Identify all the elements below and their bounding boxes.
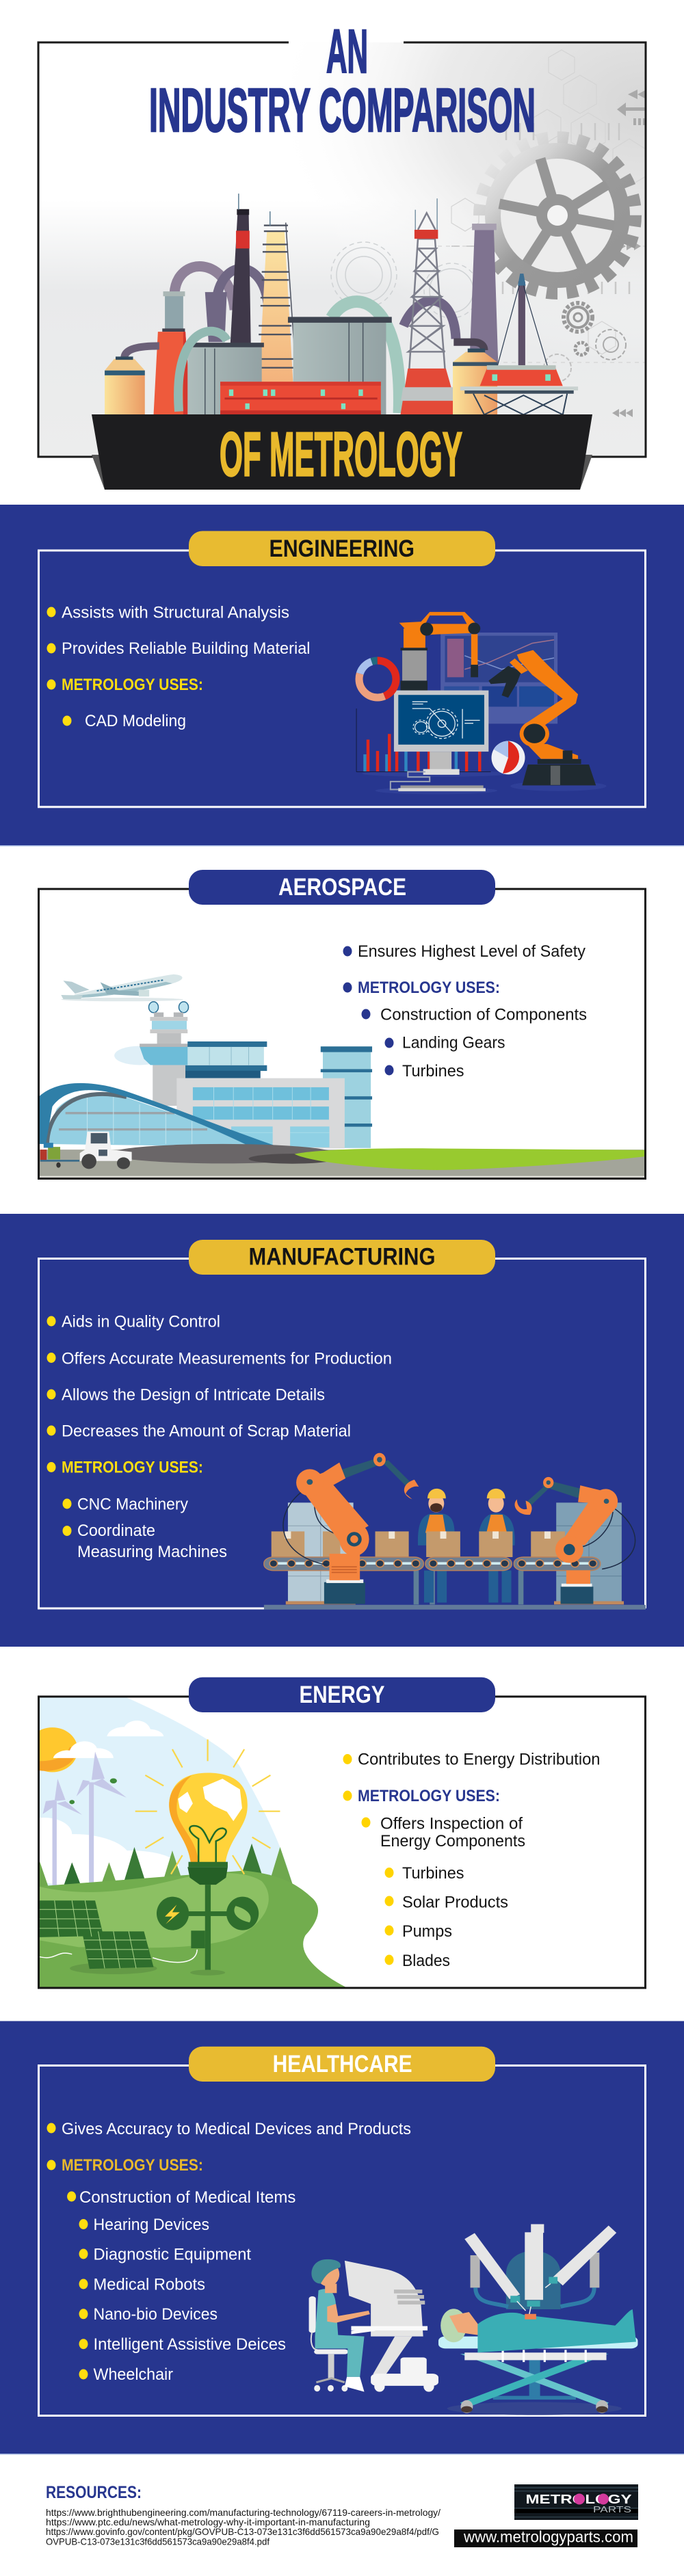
bulb base and post: [157, 1862, 259, 1976]
conveyors: [264, 1557, 601, 1571]
bullet: hearing devices: Hearing Devices: [93, 2216, 209, 2234]
ground: [39, 1150, 645, 1178]
heading pill: [189, 870, 495, 905]
control tower: [114, 1002, 197, 1106]
right red platform: [460, 365, 578, 414]
icon: outline gears: [331, 242, 479, 318]
bar chart: [356, 708, 491, 772]
bullet: landing gears: Landing Gears: [402, 1034, 505, 1052]
robot white arms: [464, 2224, 616, 2300]
heading pill: ENGINEERING: [269, 535, 415, 562]
oil derrick: [408, 198, 445, 369]
main building: [176, 1078, 345, 1148]
striped tower: [256, 211, 297, 384]
bullet list: [343, 942, 587, 1080]
frame: [38, 889, 646, 1179]
bullet: wheelchair: Wheelchair: [93, 2365, 173, 2384]
tarmac: [110, 1144, 336, 1164]
panel: header: [38, 18, 646, 490]
airplane: [61, 974, 183, 1001]
right yellow tank: [453, 349, 497, 414]
illustration: renewable energy landscape: [15, 1697, 347, 1988]
grass: [295, 1148, 645, 1170]
bullet: scrap material: Decreases the Amount of Scrap Material: [62, 1422, 351, 1441]
title: [149, 18, 536, 145]
monitor: [394, 691, 488, 775]
right robot: [514, 1477, 635, 1604]
bullet: metrology uses: METROLOGY USES:: [62, 2156, 203, 2175]
back pipes and chimneys: [174, 224, 498, 364]
background dashboard: [440, 633, 557, 723]
hills: [38, 1870, 347, 1988]
ground: [264, 1605, 646, 1610]
title: AN: [326, 18, 368, 86]
shelving stacks: [286, 1502, 624, 1604]
website badge: www.metrologyparts.com: [463, 2527, 633, 2545]
heading: RESOURCES:: [46, 2483, 142, 2502]
decorative marks bottom right: [612, 409, 633, 417]
sky: [38, 1697, 292, 1888]
derrick red cap and cone base: [401, 230, 459, 414]
clouds: [40, 1721, 179, 1885]
panel: manufacturing: [0, 1214, 684, 1647]
icon: large gear: [481, 139, 634, 292]
bullet: cnc machinery: CNC Machinery: [77, 1495, 189, 1514]
bullet: pumps: Pumps: [402, 1922, 452, 1941]
trees: [40, 1844, 293, 1886]
sun: [40, 1727, 114, 1772]
rays: [135, 1740, 280, 1874]
bullet: turbines: Turbines: [402, 1062, 464, 1080]
ruler ticks: [492, 123, 629, 294]
right robot arm: [488, 650, 596, 786]
header frame border: [38, 42, 646, 457]
heading pill: ENERGY: [300, 1682, 384, 1708]
bullet list: [47, 1313, 392, 1561]
workers: [418, 1489, 515, 1603]
ribbon fold: [92, 455, 592, 490]
url list: OVPUB-C13-073e131c3f6dd561573ca9a90e29a8f4.pdf: [46, 2536, 269, 2547]
heading pill: MANUFACTURING: [249, 1244, 435, 1271]
url list: https://www.brighthubengineering.com/manufacturing-technology/67119-careers-in-metrology/: [46, 2507, 440, 2518]
bullet: accuracy: Gives Accuracy to Medical Devices and Products: [62, 2120, 411, 2138]
bullet: medical robots: Medical Robots: [93, 2276, 205, 2294]
surgeon: [309, 2259, 370, 2392]
bullet: safety: Ensures Highest Level of Safety: [358, 942, 586, 961]
wind turbines: [43, 1752, 127, 1891]
robot support arms: [471, 2253, 599, 2307]
boxes: [272, 1531, 565, 1557]
bullet: construction of components: Construction of Components: [380, 1005, 587, 1024]
bullet: inspection of energy components: [361, 1815, 525, 1850]
baggage tug: [40, 1132, 132, 1169]
frame: [38, 1258, 646, 1608]
left yellow tank with pipe: [105, 346, 159, 414]
bullet: nano-bio devices: Nano-bio Devices: [93, 2305, 218, 2324]
url list: https://www.ptc.edu/news/what-metrology-why-it-important-in-manufacturing: [46, 2517, 370, 2527]
panel: energy: [15, 1677, 646, 1988]
shadow: [447, 2402, 622, 2415]
bullet: structural analysis: Assists with Structural Analysis: [62, 603, 289, 622]
oil rig mast: [497, 274, 547, 367]
bullet: inspection of energy components: Energy Components: [380, 1832, 525, 1850]
background hexagon pattern: [438, 50, 646, 362]
operating table: [438, 2337, 637, 2413]
heading pill: [189, 1677, 495, 1712]
banner: [92, 414, 592, 490]
curved terminal: [39, 1083, 281, 1147]
bullet: coordinate measuring machines: Coordinate: [77, 1522, 155, 1540]
shadows: [362, 771, 607, 794]
right glass tower: [321, 1046, 372, 1148]
bullet: coordinate measuring machines: Measuring Machines: [77, 1543, 227, 1561]
panel: aerospace: [38, 870, 646, 1179]
bullet: turbines: Turbines: [402, 1864, 464, 1883]
left red building and column: [154, 291, 191, 414]
patient: [440, 2309, 636, 2352]
logo: metrology parts: PARTS: [593, 2504, 631, 2514]
bullet list: [47, 603, 311, 730]
heading pill: [189, 531, 495, 566]
robot column: [506, 2251, 561, 2309]
upper wing: [185, 1041, 267, 1078]
bullet: solar products: Solar Products: [402, 1893, 508, 1912]
icon: donut chart: [359, 661, 396, 698]
bullet: cad modeling: CAD Modeling: [85, 712, 186, 730]
box tape: [285, 1531, 551, 1539]
surgeon console: [345, 2261, 438, 2392]
bullet: metrology uses: METROLOGY USES:: [358, 1787, 500, 1805]
bullet: inspection of energy components: Offers Inspection of: [380, 1815, 523, 1833]
illustration: engineering robots and monitor: [356, 612, 607, 794]
bullet: quality control: Aids in Quality Control: [62, 1313, 220, 1331]
bullet: coordinate measuring machines: [63, 1522, 227, 1561]
frame: [38, 1697, 646, 1988]
red platform: [220, 382, 381, 414]
bullet: metrology uses: METROLOGY USES:: [358, 979, 500, 997]
bullet: building material: Provides Reliable Building Material: [62, 639, 311, 658]
frame: [38, 550, 646, 807]
bullet: diagnostic equipment: Diagnostic Equipment: [93, 2246, 251, 2264]
heading pill: [189, 1240, 495, 1275]
heading pill: HEALTHCARE: [273, 2051, 412, 2077]
bullet: intelligent assistive deices: Intelligent Assistive Deices: [93, 2335, 286, 2354]
dark smokestack: [231, 194, 251, 344]
bullet: metrology uses: METROLOGY USES:: [62, 676, 203, 694]
bullet: energy distribution: Contributes to Energy Distribution: [358, 1751, 601, 1768]
frame: [38, 2065, 646, 2415]
big storage tank: [288, 302, 399, 414]
panel: healthcare: [0, 2021, 684, 2455]
left robot arm: [399, 612, 480, 691]
bullet list: [47, 2120, 411, 2384]
conveyor legs: [414, 1571, 523, 1604]
bullet: metrology uses: METROLOGY USES:: [62, 1459, 203, 1477]
header frame background: [38, 42, 646, 457]
bullet: accurate measurements: Offers Accurate Measurements for Production: [62, 1350, 392, 1368]
instruments: [510, 2277, 557, 2315]
url list: [46, 2507, 440, 2547]
logo: metrology parts: [514, 2484, 638, 2520]
url list: https://www.govinfo.gov/content/pkg/GOVPUB-C13-073e131c3f6dd561573ca9a90e29a8f4/pdf/G: [46, 2526, 439, 2537]
panel: engineering: [0, 505, 684, 847]
keyboard and cable: [391, 772, 486, 791]
solar panels: [38, 1900, 197, 1974]
icon: small grey gears: [544, 303, 626, 382]
light bulb: [169, 1773, 248, 1862]
illustration: robotic surgery: [309, 2224, 637, 2415]
bullet: blades: [384, 1952, 450, 1970]
bullet list: [343, 1751, 601, 1970]
left storage tank: [179, 331, 264, 414]
left robot: [283, 1453, 419, 1604]
icon: pie chart: [491, 741, 525, 774]
section: resources: [46, 2483, 638, 2547]
bullet: intricate details: Allows the Design of Intricate Details: [62, 1385, 325, 1405]
heading pill: [189, 2047, 495, 2082]
illustration: assembly line: [264, 1453, 646, 1610]
bullet: construction of medical items: Construction of Medical Items: [79, 2188, 295, 2207]
logo: metrology parts: METROLOGY: [525, 2493, 632, 2506]
illustration: airport: [39, 974, 645, 1178]
bullet: blades: Blades: [402, 1952, 450, 1970]
illustration: factory: [105, 194, 578, 414]
heading pill: AEROSPACE: [278, 874, 406, 901]
decorative arrows top right: [617, 90, 646, 250]
